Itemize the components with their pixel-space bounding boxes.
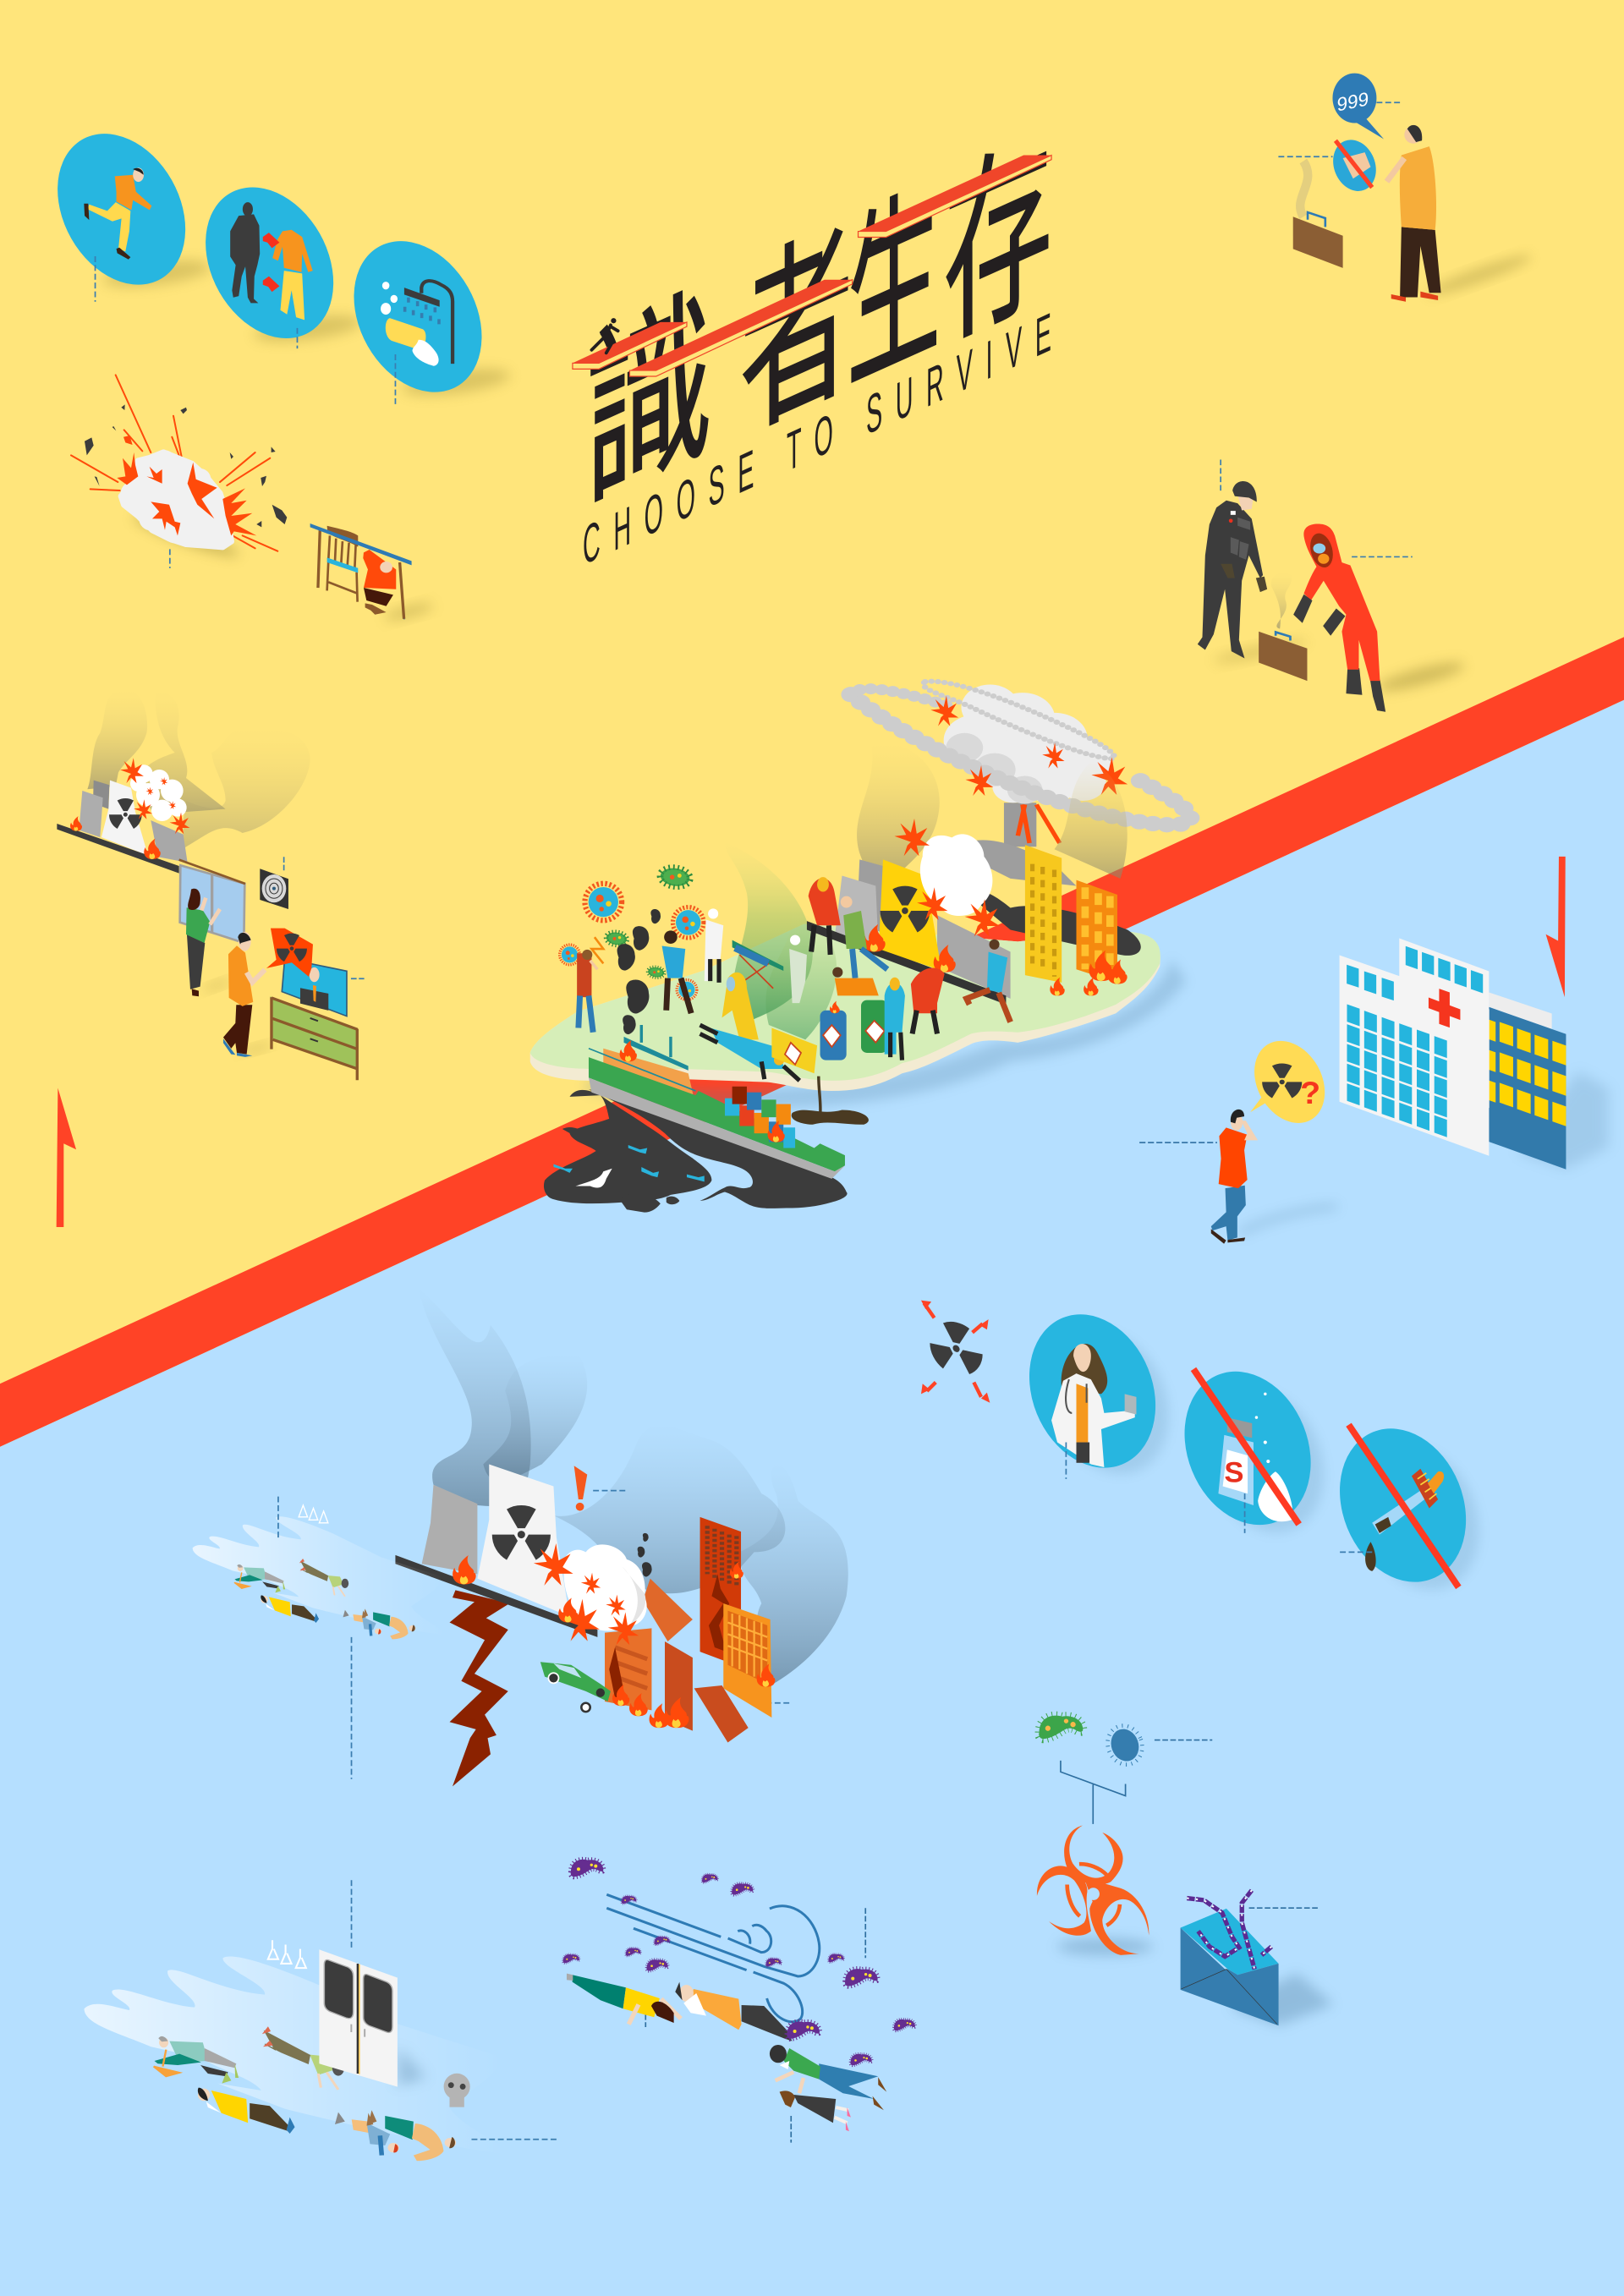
panel: wind blown virus casualties	[563, 1860, 915, 2143]
shadow of hospital	[1517, 1071, 1608, 1170]
cooling towers	[395, 1465, 597, 1637]
island top	[530, 924, 1160, 1081]
icon: do not touch disc	[1325, 134, 1384, 198]
figure: black dress woman	[780, 2091, 851, 2131]
icon: radiation question bubble	[1241, 1031, 1338, 1133]
icon: biohazard symbol	[1037, 1826, 1153, 1955]
icon: running figure on plank	[591, 318, 618, 353]
icon: burning cargo ship	[589, 1025, 845, 1179]
title characters: 者	[739, 202, 853, 464]
broken block	[605, 1628, 651, 1710]
diagonal red band	[0, 637, 1624, 1447]
figure: green shirt man running	[841, 896, 887, 978]
figure: orange shirt man	[675, 1982, 793, 2041]
burning yellow building	[1025, 845, 1062, 983]
oil slick	[544, 1089, 848, 1213]
title characters: 生	[847, 163, 941, 416]
disc: shower and soap	[330, 222, 512, 411]
mushroom cloud	[851, 682, 1190, 847]
hospital main building	[1340, 938, 1489, 1156]
figure: yellow hazmat	[722, 973, 759, 1039]
small casualties with pale cloud	[193, 1516, 445, 1639]
fallen slabs	[643, 1579, 693, 1641]
icon: explosion cloud	[534, 1533, 652, 1645]
disc: remove clothes	[181, 168, 364, 357]
icon: green barrel	[861, 1000, 887, 1053]
figure: blue shirt man running	[967, 940, 1011, 1022]
panel: earthquake nuclear plant	[395, 1289, 848, 1786]
island base edge	[530, 924, 1160, 1091]
figure: blue hazmat standing	[885, 978, 905, 1060]
burning orange building	[1050, 880, 1127, 995]
panel: central island disaster scene	[530, 682, 1190, 1213]
icon: closed doors	[319, 1949, 425, 2087]
window	[179, 860, 245, 943]
figure: red hazmat bending	[911, 967, 945, 1033]
panel: hospital and confused person	[1139, 938, 1608, 1244]
figure: man worried about radiation	[1139, 1110, 1336, 1244]
icon: large purple virus over figure	[787, 2021, 820, 2039]
arrow: downward red	[1546, 857, 1566, 997]
title characters	[584, 112, 1053, 534]
red plank 2	[629, 280, 853, 376]
smoke plumes	[419, 1289, 848, 1684]
panel: three top-left advice discs	[33, 115, 512, 411]
icon: person sheltering under desk	[310, 523, 435, 623]
icon: skull	[444, 2074, 470, 2107]
nuclear plant with yellow sign	[807, 819, 1141, 1005]
icon: contaminated envelope	[1181, 1890, 1334, 2025]
damaged buildings	[605, 1517, 775, 1742]
icon: wind lines	[606, 1894, 820, 2022]
disc: run away	[33, 115, 212, 304]
disc: doctor consultation	[1007, 1296, 1189, 1492]
icon: exclamation mark	[574, 1466, 587, 1511]
title characters: 識	[584, 264, 714, 534]
disc: no salt: S	[1224, 1456, 1243, 1488]
icon: green cabinet	[270, 996, 358, 1080]
icon: spilled yellow barrel	[771, 1028, 817, 1073]
panel: small casualties group	[193, 1505, 445, 1639]
icon: television news anchor	[282, 958, 347, 1016]
icon: hanging strap handles	[268, 1940, 306, 1968]
icon: green germ	[1039, 1716, 1083, 1739]
viruses and debris around sick man	[560, 866, 704, 1034]
icon: small flasks	[299, 1505, 328, 1523]
title: Chinese headline with red planks	[573, 112, 1053, 534]
earthquake crack	[450, 1590, 509, 1786]
icon: radiation warning speech bubble	[266, 929, 313, 977]
figure: hazmat suit responder	[1293, 523, 1385, 712]
icon: radiation symbol with dispersal arrows	[921, 1301, 990, 1403]
icon: blue virus	[1102, 1721, 1148, 1769]
cloud lumps	[944, 685, 1113, 803]
icon: suspicious briefcase with fumes	[1293, 161, 1343, 268]
panel: biological threat	[1037, 1716, 1334, 2025]
icons: purple viruses	[563, 1860, 915, 2065]
figure: person on phone	[1387, 125, 1533, 302]
icon: briefcase with fumes	[1259, 573, 1307, 681]
casualties with pale cloud	[85, 1957, 506, 2161]
icon: 999 speech bubble	[1332, 74, 1384, 139]
red plank 1	[573, 322, 687, 369]
figure: suited responder in mask	[789, 935, 807, 1003]
figures: four casualties	[567, 1974, 886, 2131]
panel: police officer and hazmat responder	[1198, 459, 1467, 712]
panel: left scene radiation warning at home	[57, 690, 365, 1080]
icon: explosion with debris	[71, 375, 287, 563]
disc: no iodine drops or pills	[1318, 1410, 1500, 1607]
smoke plumes	[87, 690, 310, 848]
icon: 999 speech bubble: 999	[1337, 87, 1369, 116]
orange office building	[723, 1603, 775, 1718]
smoke on the island	[725, 743, 1127, 1039]
connector bracket	[1061, 1761, 1126, 1824]
disc: no salt	[1162, 1352, 1344, 1550]
title characters: 存	[943, 112, 1053, 372]
icon: green car	[540, 1662, 611, 1712]
figure: man pointing to screen	[223, 932, 273, 1057]
subtitle: Choose to survive: CHOOSE TO SURVIVE	[583, 300, 1051, 577]
figure: dizzy woman in blue	[662, 930, 691, 1013]
icon: stretcher	[732, 940, 783, 989]
icon: ventilation fan	[260, 869, 288, 909]
icon: flammable blue barrel	[820, 1001, 847, 1060]
figure: collapsed blue hazmat	[700, 1025, 799, 1081]
panel: emergency call and contaminated briefcase	[1278, 74, 1533, 302]
figure: woman closing window	[186, 889, 233, 996]
figure: red hazmat with tool	[809, 877, 841, 955]
hospital right wing	[1479, 992, 1566, 1170]
island shadow	[586, 959, 1186, 1108]
arrow: upward red	[57, 1088, 76, 1227]
panel: doctor and dietary discs	[1007, 1296, 1500, 1607]
red plank 3	[859, 156, 1051, 238]
figure: white protective suit	[705, 908, 723, 983]
icon: radiation question bubble: ?	[1300, 1077, 1320, 1111]
figure: sick man in red shirt	[577, 937, 603, 1033]
figure: police officer	[1198, 481, 1267, 658]
tall red building	[700, 1517, 743, 1661]
panel: large casualties in corridor	[85, 1940, 506, 2161]
plant with trefoil	[57, 758, 189, 874]
figure: green shirt woman	[770, 2045, 886, 2110]
figure: yellow shirt woman	[567, 1974, 681, 2025]
icon: oil drip pool	[792, 1077, 869, 1125]
figure: orange crouching man	[832, 967, 879, 995]
